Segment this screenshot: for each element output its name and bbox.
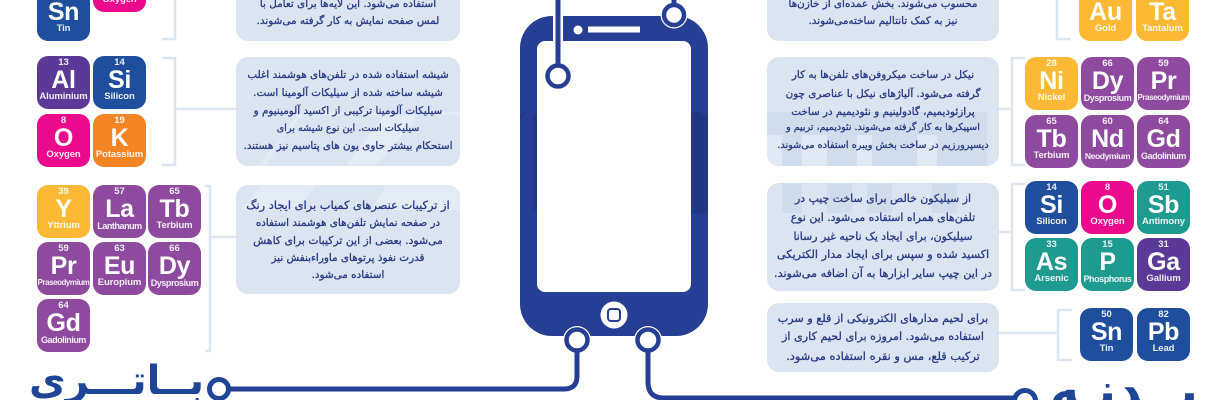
panel: touch layers text [236, 0, 460, 41]
element: O right [1081, 181, 1134, 234]
element: Si: Si [108, 66, 131, 94]
element: Y: Y [55, 195, 72, 223]
phone body [520, 16, 708, 336]
element: Ga: 31 [1158, 239, 1169, 250]
element: Eu [93, 242, 146, 295]
element: Al: Aluminium [39, 91, 88, 102]
panel: solder text: استفاده می‌شود. امروزه برای لحیم کاری از [782, 330, 984, 343]
element: Dy: 66 [169, 243, 180, 254]
element: K: K [111, 124, 128, 152]
panel: nickel text: پرازئودیمیم، گادولینیم و نئودیمیم در ساخت [791, 106, 975, 118]
element: Si [93, 56, 146, 109]
element: Tb right: Tb [1037, 125, 1066, 153]
element: K: 19 [114, 115, 125, 126]
element: Sn right: Sn [1091, 318, 1122, 346]
panel: capacitors text: نیز به کمک تانتالیم ساخته‌می‌شوند. [808, 15, 958, 27]
element: Al [37, 56, 90, 109]
element: Dy [148, 242, 201, 295]
element: As: As [1036, 248, 1067, 276]
panel: glass text: شیشه ساخته شده از سیلیکات آلومینا است. [253, 87, 443, 99]
panel: nickel text: اسپیکرها به کار گرفته می‌شوند. نئودیمیم، تربیم و [786, 122, 980, 133]
element: Ga: Ga [1147, 248, 1180, 276]
element: Pr right [1137, 57, 1190, 110]
element: O: Oxygen [46, 149, 81, 160]
element: Gd right: Gd [1146, 125, 1181, 153]
panel: touch layers text: لمس صفحه نمایش به کار گرفته می‌شوند. [257, 15, 439, 27]
panel: display colour text: می‌شود. بعضی از این ترکیبات برای کاهش [253, 234, 443, 247]
element: Sn top left: Tin [57, 23, 70, 34]
element: Pr: Pr [51, 252, 76, 280]
element: Dy right: 66 [1102, 58, 1113, 69]
element: Tb [148, 185, 201, 238]
panel: glass text: سیلیکات آلومینا ترکیبی از اکسید آلومینیوم و [254, 105, 442, 117]
element: Dy: Dy [159, 252, 190, 280]
element: Y: Yttrium [47, 220, 80, 231]
element: Si right: Si [1040, 191, 1063, 219]
element: Eu: Europium [98, 277, 141, 288]
element: Pb [1137, 308, 1190, 361]
element: La: La [105, 195, 134, 223]
element: Pr right: Praseodymium [1138, 93, 1189, 102]
element: P: Phosphorus [1083, 274, 1132, 284]
element: As: 33 [1046, 239, 1057, 250]
element: Tb: Tb [160, 195, 189, 223]
panel: display colour text [236, 185, 460, 294]
element: La: Lanthanum [97, 221, 142, 231]
element: Pb: Lead [1153, 343, 1174, 354]
connector: body line [634, 326, 1016, 398]
panel: silicon text: تلفن‌های همراه استفاده می‌شود. این نوع [791, 211, 975, 224]
element: As: Arsenic [1034, 273, 1069, 284]
panel: glass text [236, 57, 460, 166]
element: Sb: Sb [1148, 191, 1179, 219]
connector: top screen [548, 0, 568, 86]
connector: top right [660, 0, 688, 28]
element: Pr: Praseodymium [38, 278, 89, 287]
panel: nickel text: نیکل در ساخت میکروفن‌های تلفن‌ها به کار [792, 69, 974, 81]
element: Pb: 82 [1158, 309, 1169, 320]
element: Tb: 65 [169, 186, 180, 197]
element: Ta: Tantalum [1142, 23, 1183, 34]
element: Dy right: Dysprosium [1084, 93, 1131, 103]
element: Sb [1137, 181, 1190, 234]
element: P: P [1099, 248, 1116, 276]
panel: solder text: ترکیب قلع، مس و نقره استفاده می‌شود. [786, 349, 980, 363]
element: Tb right: Terbium [1033, 150, 1070, 161]
element: O: O [54, 124, 73, 152]
element: Sn right: Tin [1100, 343, 1113, 354]
element: Si: 14 [114, 57, 125, 68]
element: Si right: 14 [1046, 182, 1057, 193]
panel: silicon text: از سیلیکون خالص برای ساخت چیپ در [795, 192, 971, 205]
element: K [93, 114, 146, 167]
element: Ga: Gallium [1146, 273, 1181, 284]
panel: solder text [767, 303, 999, 372]
element: Ni: 28 [1046, 58, 1057, 69]
element: Gd right: Gadolinium [1141, 151, 1186, 161]
element: Nd: 60 [1102, 116, 1113, 127]
element: La [93, 185, 146, 238]
panel: silicon text [767, 183, 999, 291]
element: Pr [37, 242, 90, 295]
panel: glass text: سیلیکات است. این نوع شیشه برای [277, 123, 419, 134]
element: Gd: Gadolinium [41, 335, 86, 345]
element: Ni: Ni [1039, 67, 1064, 95]
bracket: display group [205, 186, 236, 351]
bracket: left top group [162, 0, 175, 39]
element: Y: 39 [58, 186, 69, 197]
element: Si right [1025, 181, 1078, 234]
panel: silicon text: در این چیپ سایر ابزارها به آن اضافه می‌شوند. [774, 267, 992, 280]
element: Sb: 51 [1158, 182, 1169, 193]
element: Gd [37, 299, 90, 352]
element: Gd right [1137, 115, 1190, 168]
panel: nickel text: گرفته می‌شود. آلیاژهای نیکل با عناصری چون [786, 88, 980, 100]
element: Ni [1025, 57, 1078, 110]
element: Dy right: Dy [1092, 67, 1123, 95]
element: Pr right: 59 [1158, 58, 1169, 69]
element: O right: 8 [1105, 182, 1110, 193]
connector: battery line [229, 326, 591, 389]
element: Ta [1136, 0, 1189, 41]
panel: silicon text: سیلیکون، برای ایجاد یک ناحیه غیر رسانا [793, 230, 973, 243]
element: Si right: Silicon [1036, 216, 1067, 227]
element: Au: Gold [1095, 23, 1116, 34]
element: Sn right [1080, 308, 1133, 361]
element: La: 57 [114, 186, 125, 197]
panel: capacitors text [767, 0, 999, 41]
element: Tb right: 65 [1046, 116, 1057, 127]
bracket: glass group [162, 58, 236, 165]
element: Sb: Antimony [1142, 216, 1185, 227]
element: O top [93, 0, 146, 12]
element: K: Potassium [96, 149, 143, 160]
element: Pb: Pb [1148, 318, 1179, 346]
bracket: solder group [999, 310, 1072, 360]
element: P [1081, 238, 1134, 291]
panel: display colour text: در صفحه نمایش تلفن‌های هوشمند استفاده [256, 217, 440, 229]
element: Ga [1137, 238, 1190, 291]
element: Al: 13 [58, 57, 69, 68]
panel: display colour text: از ترکیبات عنصرهای کمیاب برای ایجاد رنگ [246, 198, 450, 212]
bracket: nickel group [999, 58, 1025, 165]
element: Gd: Gd [46, 309, 81, 337]
element: Dy right [1081, 57, 1134, 110]
panel: silicon text: اکسید شده و سپس برای ایجاد مدار الکتریکی [777, 248, 989, 261]
element: Nd [1081, 115, 1134, 168]
element: Pr: 59 [58, 243, 69, 254]
element: Eu: Eu [104, 252, 135, 280]
element: P: 15 [1102, 239, 1113, 250]
element: Tb right [1025, 115, 1078, 168]
bracket: silicon group [999, 184, 1025, 290]
panel: display colour text: قدرت نفوذ پرتوهای ماوراءبنفش نیز [271, 252, 425, 264]
element: Gd: 64 [58, 300, 69, 311]
element: Gd right: 64 [1158, 116, 1169, 127]
element: Eu: 63 [114, 243, 125, 254]
element: Dy: Dysprosium [151, 278, 198, 288]
element: Au [1079, 0, 1132, 41]
element: Nd: Nd [1091, 125, 1124, 153]
element: Tb: Terbium [156, 220, 193, 231]
element: Al: Al [51, 66, 76, 94]
element: O right: O [1098, 191, 1117, 219]
panel: solder text: برای لحیم مدارهای الکترونیکی از قلع و سرب [778, 312, 988, 325]
element: Y [37, 185, 90, 238]
panel: glass text: شیشه استفاده شده در تلفن‌های هوشمند اغلب [247, 69, 449, 81]
panel: nickel text [767, 57, 999, 166]
element: O [37, 114, 90, 167]
element: Sn right: 50 [1101, 309, 1112, 320]
element: As [1025, 238, 1078, 291]
panel: display colour text: استفاده می‌شود. [312, 269, 384, 281]
bracket: right top group [1057, 0, 1071, 39]
element: Pr right: Pr [1151, 67, 1176, 95]
panel: nickel text: دیسپرورزیم در ساخت بخش ویبره استفاده می‌شوند. [777, 140, 989, 151]
element: Sn top left [37, 0, 90, 41]
element: O: 8 [61, 115, 66, 126]
element: O right: Oxygen [1090, 216, 1125, 227]
element: Nd: Neodymium [1085, 151, 1130, 161]
element: Ni: Nickel [1038, 92, 1065, 103]
element: Si: Silicon [104, 91, 135, 102]
panel: glass text: استحکام بیشتر حاوی یون های پتاسیم نیز هستند. [244, 140, 452, 152]
